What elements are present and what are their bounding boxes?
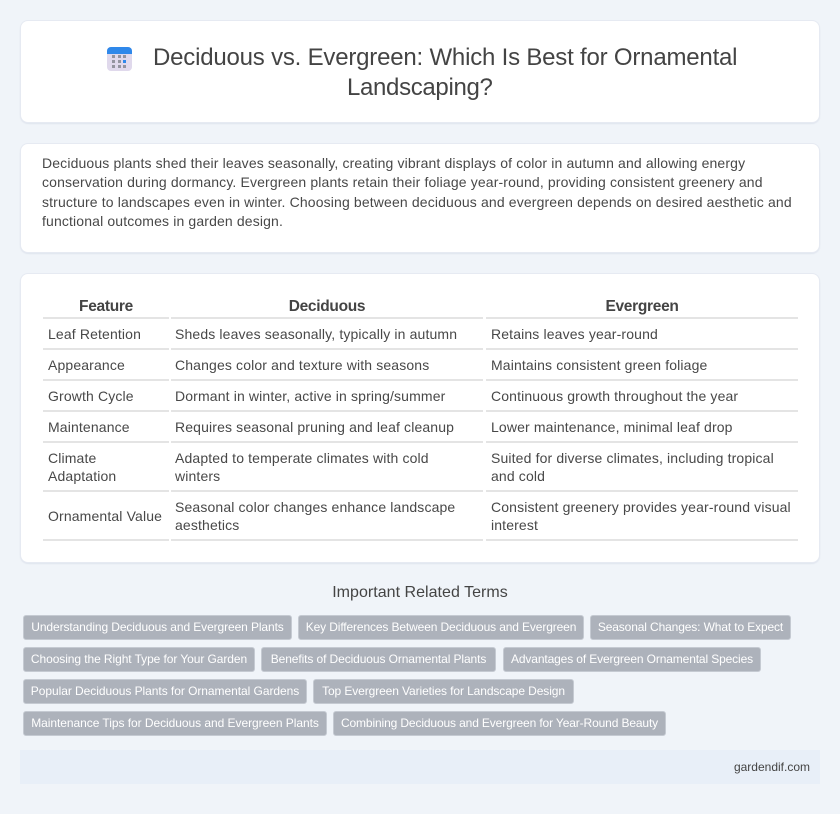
row: Appearance: Maintains consistent green foliage [491,357,707,373]
tag: Choosing the Right Type for Your Garden [31,652,247,666]
title: Deciduous vs. Evergreen: Which Is Best for Ornamental [153,44,737,71]
row: Ornamental Value: Seasonal color changes enhance landscape [175,499,455,515]
row: Maintenance: Lower maintenance, minimal leaf drop [491,419,733,435]
tag [23,615,292,640]
row: Maintenance: Maintenance [48,419,130,435]
intro paragraph: structure to landscapes even in winter. Choosing between deciduous and evergreen depends on desired aesthetic and [42,194,792,210]
footer bar [20,750,820,784]
row: Growth Cycle: Continuous growth throughout the year [491,388,738,404]
title: Landscaping? [347,74,493,101]
tag [23,711,327,736]
row: Appearance: Changes color and texture with seasons [175,357,429,373]
title [153,44,737,101]
row: Leaf Retention: Retains leaves year-round [491,326,658,342]
intro text panel [20,143,820,253]
tag [23,679,307,704]
comparison table panel [20,273,820,563]
tag: Key Differences Between Deciduous and Evergreen [306,620,576,634]
row: Maintenance [48,419,733,435]
table header: Feature: Feature [79,298,133,315]
row: Ornamental Value [48,499,791,533]
row: Climate Adaptation: and cold [491,468,545,484]
tag: Popular Deciduous Plants for Ornamental Gardens [31,684,299,698]
row: Climate Adaptation: Adapted to temperate climates with cold [175,450,429,466]
row: Leaf Retention: Leaf Retention [48,326,141,342]
tag: Seasonal Changes: What to Expect [598,620,783,634]
row: Appearance [48,357,707,373]
row: Maintenance: Requires seasonal pruning and leaf cleanup [175,419,454,435]
tag [590,615,791,640]
row: Ornamental Value: interest [491,517,538,533]
row: Climate Adaptation: Climate [48,450,96,466]
icon: calendar [107,47,132,71]
table header: Evergreen: Evergreen [605,298,679,315]
tag: Advantages of Evergreen Ornamental Species [511,652,753,666]
intro paragraph: conservation during dormancy. Evergreen plants retain their foliage year-round, providing consistent greenery and [42,174,763,190]
comparison table [43,298,798,541]
row: Growth Cycle [48,388,738,404]
row: Growth Cycle: Growth Cycle [48,388,134,404]
intro paragraph: Deciduous plants shed their leaves seasonally, creating vibrant displays of color in autumn and allowing energy [42,155,745,171]
row: Ornamental Value: aesthetics [175,517,239,533]
header card [20,20,820,123]
row: Ornamental Value: Consistent greenery provides year-round visual [491,499,791,515]
related terms heading: Important Related Terms [332,584,508,601]
tag: Combining Deciduous and Evergreen for Year-Round Beauty [341,716,658,730]
tag [503,647,761,672]
row: Climate Adaptation: winters [175,468,220,484]
tag [313,679,574,704]
tag: Understanding Deciduous and Evergreen Plants [31,620,284,634]
row: Climate Adaptation [48,450,774,484]
row: Climate Adaptation: Adaptation [48,468,116,484]
related terms tags [23,615,791,736]
tag [333,711,666,736]
row: Appearance: Appearance [48,357,125,373]
tag: Top Evergreen Varieties for Landscape Design [322,684,565,698]
row: Leaf Retention [48,326,658,342]
tag: Maintenance Tips for Deciduous and Evergreen Plants [31,716,319,730]
tag [298,615,584,640]
table header: Deciduous: Deciduous [289,298,365,315]
tag: Benefits of Deciduous Ornamental Plants [271,652,486,666]
row: Ornamental Value: Ornamental Value [48,508,162,524]
row: Leaf Retention: Sheds leaves seasonally, typically in autumn [175,326,457,342]
row: Climate Adaptation: Suited for diverse climates, including tropical [491,450,774,466]
row: Growth Cycle: Dormant in winter, active in spring/summer [175,388,445,404]
intro paragraph: functional outcomes in garden design. [42,213,283,229]
tag [23,647,255,672]
tag [261,647,496,672]
footer site name: gardendif.com [734,760,810,774]
intro paragraph [42,155,792,229]
